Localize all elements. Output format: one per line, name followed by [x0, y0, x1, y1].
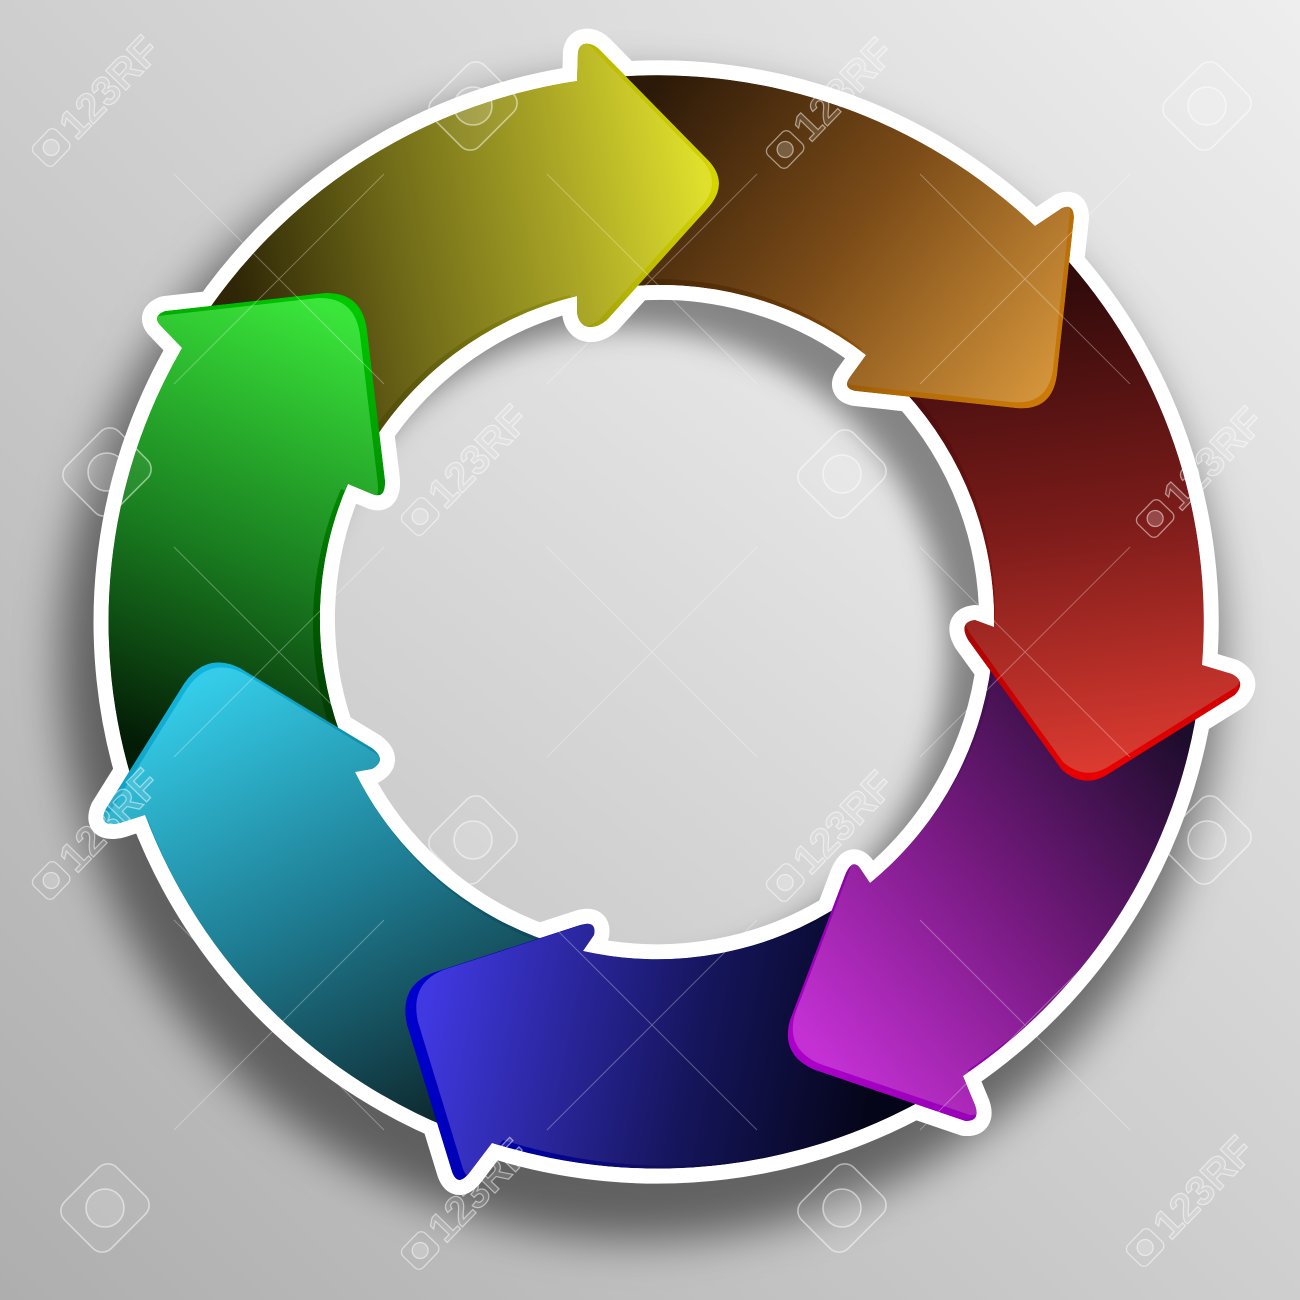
- arrow: red: [905, 244, 1241, 781]
- white sticker outline: [103, 44, 1240, 1180]
- watermarks: 123RF: [784, 29, 902, 150]
- watermarks: 123RF: [419, 1130, 537, 1251]
- inner hole shadow: [353, 300, 979, 936]
- arrow: yellow tail: [211, 44, 638, 433]
- arrow: teal: [103, 662, 563, 1141]
- watermarks: 123RF: [1154, 398, 1272, 519]
- ring drop shadow: [60, 80, 1220, 1240]
- arrow: purple: [788, 639, 1204, 1121]
- arrow: blue: [405, 910, 916, 1180]
- watermarks: 123RF: [784, 762, 902, 883]
- centre hole background: [331, 296, 983, 948]
- watermarks: 123RF: [50, 27, 168, 148]
- watermarks: 123RF: [50, 760, 168, 881]
- arrow: yellow head: [540, 44, 719, 328]
- arrow: brown: [611, 69, 1074, 408]
- watermarks: 123RF: [419, 396, 537, 517]
- watermark hairlines: [174, 174, 1130, 1130]
- watermarks: 123RF: [1144, 1127, 1262, 1248]
- arrow: green: [102, 293, 385, 795]
